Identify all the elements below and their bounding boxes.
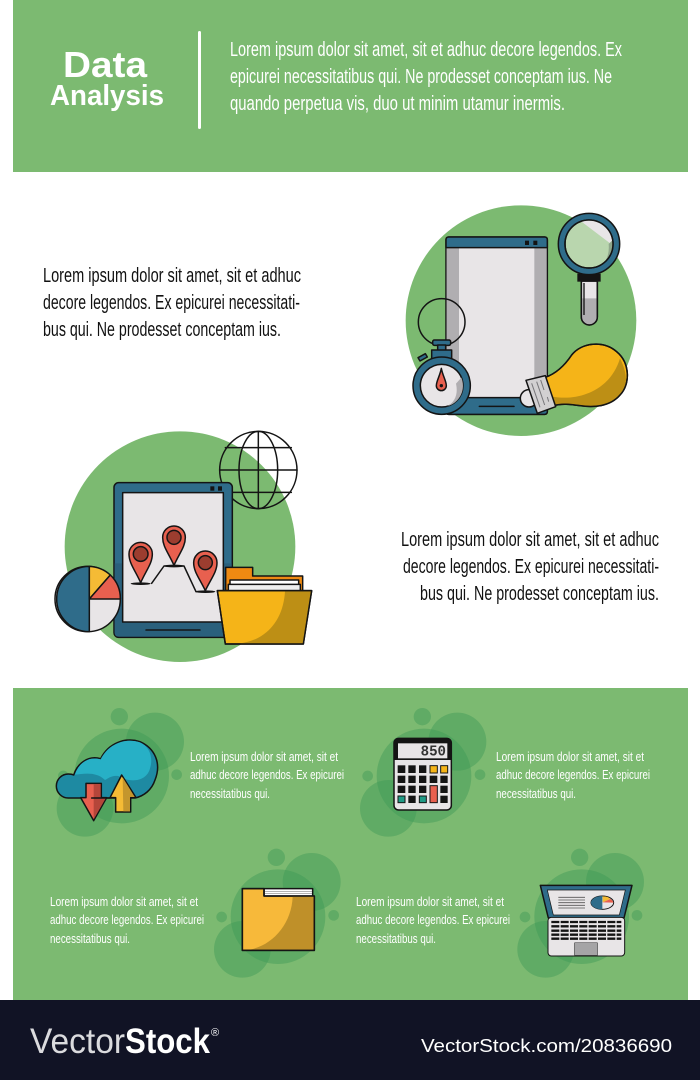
image id: VectorStock.com/20836690 <box>421 1036 672 1056</box>
text block: middle right <box>401 529 659 605</box>
VectorStock logo: ® <box>211 1027 219 1039</box>
text: laptop item: Lorem ipsum dolor sit amet, sit et <box>356 894 504 909</box>
text: folder item: adhuc decore legendos. Ex epicurei <box>50 912 204 927</box>
text block: upper left <box>43 265 301 341</box>
icon: open folder <box>217 567 312 644</box>
item: folder <box>214 849 341 978</box>
text: calculator item: adhuc decore legendos. Ex epicurei <box>496 767 650 782</box>
icon: stopwatch <box>413 299 470 414</box>
icon: folder <box>242 889 314 950</box>
icon: globe <box>220 431 297 509</box>
illustration: phone with magnifier, stopwatch and bulb <box>406 205 636 436</box>
text: calculator item: necessitatibus qui. <box>496 786 576 801</box>
title <box>50 44 164 112</box>
text: folder item <box>50 894 204 946</box>
text: calculator item <box>496 749 650 801</box>
title: Data <box>63 44 148 85</box>
text: folder item: necessitatibus qui. <box>50 931 130 946</box>
text: laptop item: necessitatibus qui. <box>356 931 436 946</box>
icon: calculator: 850 <box>421 745 446 761</box>
pie chart <box>55 566 120 632</box>
item: cloud transfer <box>56 708 184 837</box>
text: cloud item: necessitatibus qui. <box>190 786 270 801</box>
panel: lower green section <box>13 688 688 1000</box>
text: laptop item: adhuc decore legendos. Ex epicurei <box>356 912 510 927</box>
icon: cloud with arrows <box>56 740 158 821</box>
footer bar <box>0 1000 700 1080</box>
text block: upper left: Lorem ipsum dolor sit amet, sit et adhuc <box>43 265 301 287</box>
header panel <box>13 0 688 172</box>
item: calculator <box>360 708 486 837</box>
text: cloud item: Lorem ipsum dolor sit amet, sit et <box>190 749 338 764</box>
text: laptop item <box>356 894 510 946</box>
icon: light bulb <box>520 344 627 413</box>
icon: smartphone <box>446 237 547 414</box>
text block: upper left: bus qui. Ne prodesset conceptam ius. <box>43 319 281 341</box>
title: Analysis <box>50 80 164 112</box>
header text block <box>230 39 622 115</box>
header text block: quando perpetua vis, duo ut minim utamur inermis. <box>230 93 565 115</box>
item: laptop <box>517 849 644 978</box>
text: cloud item <box>190 749 344 801</box>
illustration: tablet with map pins, globe, pie chart and folder <box>55 431 312 662</box>
text: calculator item: Lorem ipsum dolor sit amet, sit et <box>496 749 644 764</box>
text: folder item: Lorem ipsum dolor sit amet, sit et <box>50 894 198 909</box>
text block: upper left: decore legendos. Ex epicurei necessitati- <box>43 292 300 314</box>
VectorStock logo: Stock <box>125 1022 210 1061</box>
VectorStock logo <box>30 1022 219 1061</box>
VectorStock logo: Vector <box>30 1022 125 1061</box>
icon: laptop <box>540 885 632 956</box>
map pins and route <box>129 526 217 593</box>
icon: tablet <box>114 483 232 637</box>
text: cloud item: adhuc decore legendos. Ex epicurei <box>190 767 344 782</box>
icon: magnifying glass <box>558 213 620 325</box>
